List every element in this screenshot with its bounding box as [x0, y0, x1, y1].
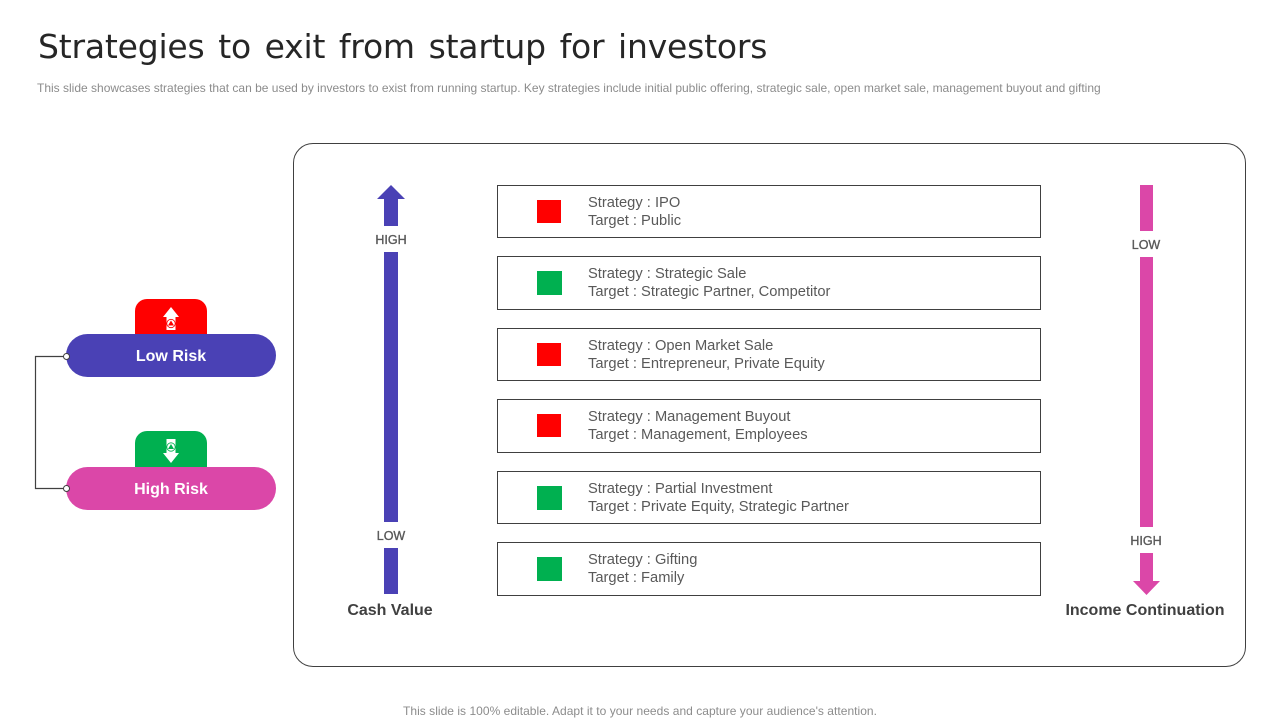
low risk pill [66, 334, 276, 377]
strategy: management buyout [497, 399, 1041, 453]
low risk pill: Low Risk [136, 348, 206, 365]
strategy: strategic sale: Target : Strategic Partner, Competitor [588, 284, 830, 300]
cash value label: Cash Value [347, 602, 433, 619]
strategy: gifting: Target : Family [588, 570, 684, 586]
strategy: strategic sale [497, 256, 1041, 310]
strategy: gifting: Strategy : Gifting [588, 552, 697, 568]
title: Strategies to exit from startup for investors [38, 27, 767, 66]
income continuation high label: HIGH [1130, 534, 1162, 548]
strategy: open market sale: Target : Entrepreneur, Private Equity [588, 356, 825, 372]
cash value high label: HIGH [375, 233, 407, 247]
strategy: partial investment [497, 471, 1041, 524]
strategy: management buyout: Strategy : Management Buyout [588, 409, 790, 425]
strategy: management buyout: Target : Management, Employees [588, 427, 808, 443]
icon tab: low risk, up arrow [135, 299, 207, 339]
strategy: open market sale [497, 328, 1041, 381]
strategy: partial investment: Target : Private Equity, Strategic Partner [588, 499, 849, 515]
icon tab: high risk, down arrow [135, 431, 207, 471]
high risk pill: High Risk [134, 481, 208, 498]
cash value low label: LOW [377, 529, 405, 543]
cash value axis arrow [377, 185, 405, 594]
main panel [293, 143, 1246, 667]
income continuation axis arrow [1133, 185, 1160, 595]
footer note: This slide is 100% editable. Adapt it to your needs and capture your audience's attention. [403, 704, 877, 718]
strategy: IPO: Target : Public [588, 213, 681, 229]
strategy: partial investment: Strategy : Partial Investment [588, 481, 772, 497]
strategy: IPO [497, 185, 1041, 238]
income continuation low label: LOW [1132, 238, 1160, 252]
connector between risk levels [34, 353, 70, 492]
strategy: gifting [497, 542, 1041, 596]
strategy: IPO: Strategy : IPO [588, 195, 680, 211]
high risk pill [66, 467, 276, 510]
strategy: open market sale: Strategy : Open Market Sale [588, 338, 773, 354]
income continuation label: Income Continuation [1065, 602, 1225, 619]
strategy: strategic sale: Strategy : Strategic Sale [588, 266, 746, 282]
subtitle: This slide showcases strategies that can be used by investors to exist from running startup. Key strategies include initial public offering, strategic sale, open market sale, management buyout and gifting [37, 81, 1101, 95]
